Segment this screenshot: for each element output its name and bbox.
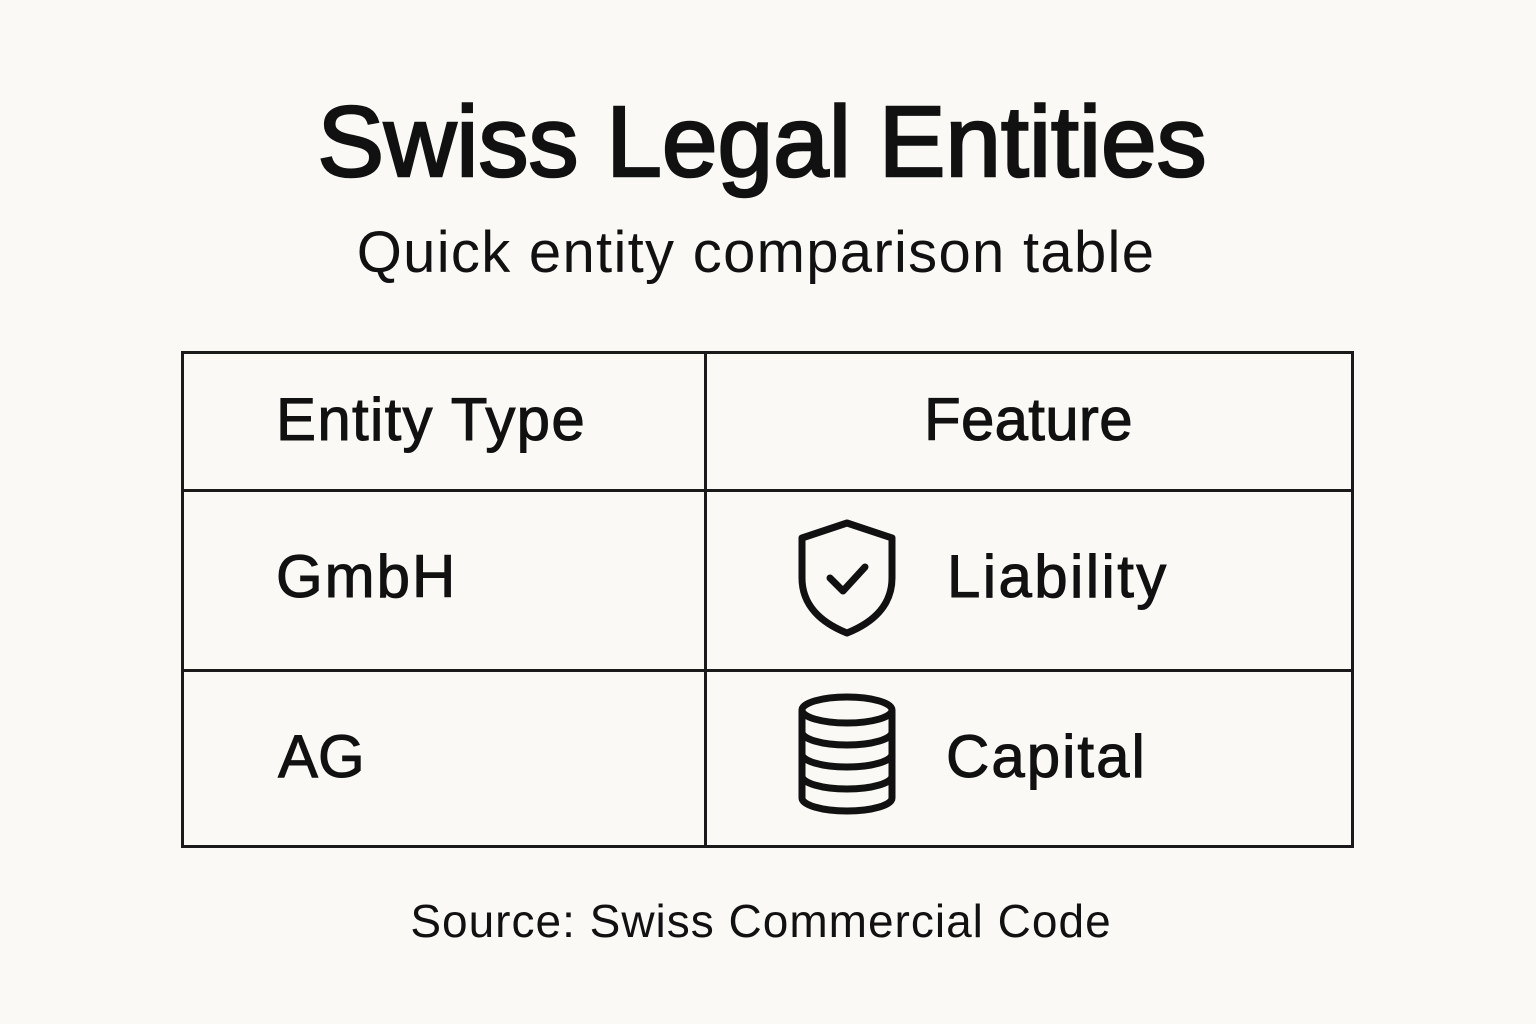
- header: Feature: Feature: [924, 386, 1133, 453]
- feature: Capital: Capital: [946, 723, 1147, 790]
- title: Swiss Legal Entities: [317, 86, 1207, 198]
- header: Entity Type: Entity Type: [276, 386, 586, 453]
- icon: shield: [798, 520, 896, 636]
- source note: Source: Swiss Commercial Code: [410, 895, 1112, 947]
- row label: GmbH: GmbH: [276, 543, 457, 610]
- row label: AG: AG: [278, 723, 365, 790]
- table: [181, 351, 1354, 848]
- feature: Liability: Liability: [947, 543, 1169, 610]
- icon: database: [798, 694, 896, 814]
- subtitle: Quick entity comparison table: [357, 220, 1155, 285]
